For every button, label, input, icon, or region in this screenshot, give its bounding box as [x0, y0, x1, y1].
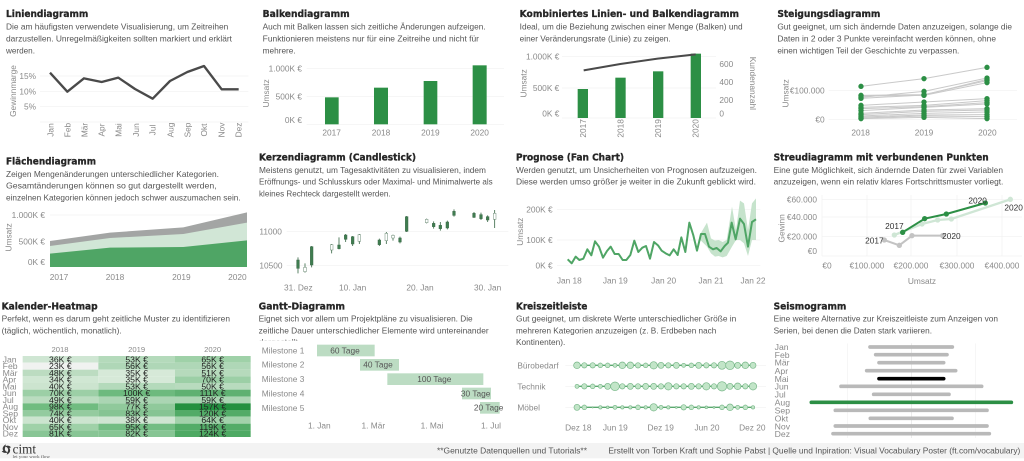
description: Kerzendiagramm	[259, 165, 493, 198]
connected scatter plot	[776, 195, 1023, 286]
combo chart: Umsatz und Kundenanzahl: 500K €	[533, 83, 560, 93]
heatmap table: 56K €	[201, 361, 224, 371]
circle timeline chart: Möbel	[517, 403, 540, 413]
combo chart: Umsatz und Kundenanzahl	[518, 52, 758, 138]
description: Kreiszeitleiste: mehreren Kategorien anzuzeigen (z. B. Erdbeben nach	[516, 325, 717, 335]
heatmap table: 83K €	[125, 408, 148, 418]
description: Kreiszeitleiste: Kontinenten).	[516, 337, 565, 347]
heading: Kreiszeitleiste: Kreiszeitleiste	[516, 302, 588, 313]
heatmap table: 59K €	[125, 395, 148, 405]
description: Balkendiagramm: mehrere.	[263, 45, 296, 55]
seismogram chart: Aug	[775, 398, 790, 408]
heatmap table: 124K €	[199, 429, 227, 439]
connected scatter plot: €60.000	[787, 195, 817, 205]
line chart: Gewinnmarge: Gewinnmarge	[8, 65, 18, 117]
panel: Flächendiagramm	[3, 156, 247, 282]
heatmap table: Jan	[3, 354, 17, 364]
line chart: Gewinnmarge	[8, 65, 248, 137]
combo chart: Umsatz und Kundenanzahl: 2018	[615, 119, 625, 138]
heatmap table: Jun	[3, 388, 17, 398]
panel: Kreiszeitleiste	[516, 302, 766, 433]
description: Seismogramm	[774, 314, 998, 335]
heatmap table: 120K €	[199, 408, 227, 418]
line chart: Gewinnmarge: Sep	[182, 122, 192, 137]
fan chart: Umsatz: 100K €	[526, 235, 553, 245]
circle timeline chart: Dez 20	[739, 423, 766, 433]
panel: Liniendiagramm	[5, 9, 248, 137]
heading: Balkendiagramm: Balkendiagramm	[263, 9, 350, 20]
description: Kalender-Heatmap: (täglich, wöchentlich, monatlich).	[2, 325, 122, 335]
description: Balkendiagramm: Auch mit Balken lassen sich zeitliche Änderungen aufzeigen.	[263, 21, 486, 31]
bar chart: Umsatz: 1.000K €	[269, 63, 302, 73]
description: Kombiniertes Diagramm	[520, 21, 743, 43]
heatmap table: 65K €	[201, 354, 224, 364]
area chart: Umsatz: 0K €	[28, 257, 45, 267]
heatmap table: Mär	[3, 368, 18, 378]
panel: Steigungsdiagramm	[777, 9, 1017, 138]
bar chart: Umsatz: 0K €	[285, 115, 302, 125]
description: Liniendiagramm: darzustellen. Unregelmäßigkeiten sollten markiert und erklärt	[6, 33, 233, 43]
heatmap table: 40K €	[49, 415, 72, 425]
description: Flächendiagramm: Zeigen Mengenänderungen unterschiedlicher Kategorien.	[6, 169, 219, 179]
line chart: Gewinnmarge: 10%	[19, 86, 37, 96]
description: Kalender-Heatmap: Perfekt, wenn es darum geht zeitliche Muster zu identifizieren	[2, 314, 230, 324]
connected scatter plot: Umsatz	[908, 276, 936, 286]
heatmap table: 64K €	[201, 415, 224, 425]
heading: Seismogramm: Seismogramm	[774, 302, 846, 313]
heatmap table: Feb	[3, 361, 18, 371]
description: Prognose: Werden genutzt, um Unsicherheiten von Prognosen aufzuzeigen.	[516, 165, 757, 175]
gantt chart: 1. Jan	[308, 420, 331, 430]
connected scatter plot: 2020	[1004, 202, 1023, 212]
gantt chart: Milestone 5	[262, 403, 305, 413]
panel: Kerzendiagramm	[259, 153, 508, 292]
connected scatter plot: €400.000	[985, 261, 1020, 271]
seismogram chart: Jan	[775, 342, 789, 352]
description: Liniendiagramm	[5, 21, 233, 55]
heading: Kalender-Heatmap: Kalender-Heatmap	[2, 302, 98, 313]
bar chart: Umsatz	[261, 63, 504, 138]
seismogram chart: Nov	[775, 421, 791, 431]
candlestick chart	[259, 209, 508, 292]
description: Kombiniertes Diagramm: einer Veränderungsrate (Linie) zu zeigen.	[520, 33, 671, 43]
seismogram chart: Apr	[775, 366, 788, 376]
seismogram chart: Mär	[775, 358, 790, 368]
line chart: Gewinnmarge: Dez	[234, 123, 244, 137]
fan chart: Umsatz: Jan 18	[557, 276, 582, 286]
heatmap table: 34K €	[49, 375, 72, 385]
heatmap table: 98K €	[49, 402, 72, 412]
gantt chart: Milestone 1	[262, 345, 305, 355]
candlestick chart: 31. Dez	[284, 282, 313, 292]
heatmap table: Dez	[3, 429, 18, 439]
heatmap table: Sep	[3, 408, 18, 418]
description: Kerzendiagramm: Eröffnungs- und Schlusskurs oder Maximal- und Minimalwerte als	[259, 177, 493, 187]
combo chart: Umsatz und Kundenanzahl: 200	[719, 95, 734, 105]
seismogram chart: Mai	[775, 374, 789, 384]
line chart: Gewinnmarge: Mär	[80, 123, 90, 137]
connected scatter plot: €100.000	[850, 261, 885, 271]
heatmap table: 23K €	[49, 361, 72, 371]
line chart: Gewinnmarge: Jul	[148, 125, 158, 135]
fan chart: Umsatz: Jan 19	[603, 276, 628, 286]
bar chart: Umsatz: Umsatz	[261, 79, 271, 107]
circle timeline chart: Jun 19	[603, 423, 628, 433]
heatmap table: 70K €	[49, 388, 72, 398]
combo chart: Umsatz und Kundenanzahl: 0	[719, 108, 724, 118]
fan chart: Umsatz	[515, 198, 766, 286]
connected scatter plot: 2017	[885, 221, 904, 231]
description: Steigungsdiagramm: einen wichtigen Teil der Geschichte zu verpassen.	[777, 45, 959, 55]
heatmap table: 65K €	[49, 422, 72, 432]
circle timeline chart	[517, 360, 766, 433]
area chart: Umsatz: 1.000K €	[12, 210, 45, 220]
line chart: Gewinnmarge: Nov	[217, 122, 227, 137]
description: Prognose	[516, 165, 757, 187]
heatmap table: 35K €	[125, 375, 148, 385]
connected scatter plot: 2020	[942, 231, 961, 241]
gantt chart: Milestone 2	[262, 360, 305, 370]
panel: Streudiagramm	[774, 153, 1023, 286]
line chart: Gewinnmarge: Mai	[113, 123, 123, 137]
gantt chart: 60 Tage	[330, 345, 360, 355]
description: Gantt-Diagramm: dargestellt.	[259, 337, 300, 347]
area chart: Umsatz	[3, 210, 247, 282]
slope chart: Umsatz: 2018	[851, 128, 870, 138]
area chart: Umsatz: 2017	[50, 272, 69, 282]
footer credits: Erstellt von Torben Kraft und Sophie Pabst | Quelle und Inpiration: Visual Vocabulary Poster (ft.com/vocabulary)	[608, 446, 1020, 456]
gantt chart: Milestone 3	[262, 374, 305, 384]
circle timeline chart: Bürobedarf	[517, 360, 559, 370]
description: Gantt-Diagramm	[256, 314, 509, 349]
description: Liniendiagramm: Die am häufigsten verwendete Visualisierung, um Zeitreihen	[6, 21, 228, 31]
fan chart: Umsatz: Jan 22	[740, 276, 766, 286]
footer note: data sources: **Genutzte Datenquellen und Tutorials**	[437, 446, 588, 456]
logo wordmark	[13, 441, 50, 459]
description: Steigungsdiagramm	[777, 21, 1012, 55]
description: Prognose: Diese werden umso größer je weiter in die Zukunft geblickt wird.	[516, 177, 756, 187]
heatmap table: 51K €	[201, 368, 224, 378]
description: Kreiszeitleiste: Gut geeignet, um diskrete Werte unterschiedlicher Größe in	[516, 314, 736, 324]
seismogram chart: Sep	[775, 405, 790, 415]
heatmap table: 35K €	[125, 368, 148, 378]
logo wordmark: cimt	[13, 441, 36, 456]
seismogram chart: Feb	[775, 350, 790, 360]
line chart: Gewinnmarge: Apr	[97, 123, 107, 136]
area chart: Umsatz: 500K €	[19, 236, 45, 246]
heatmap table: 53K €	[125, 381, 148, 391]
heatmap table: 100K €	[123, 388, 151, 398]
panel: Balkendiagramm	[261, 9, 504, 138]
logo wordmark: let your work flow	[13, 454, 50, 459]
connected scatter plot: €0	[822, 261, 832, 271]
line chart: Gewinnmarge: Jan	[46, 123, 56, 137]
candlestick chart: 20. Jan	[406, 282, 434, 292]
candlestick chart: 30. Jan	[474, 282, 502, 292]
combo chart: Umsatz und Kundenanzahl: 0K €	[542, 108, 560, 118]
combo chart: Umsatz und Kundenanzahl: Umsatz	[518, 69, 528, 97]
heatmap table: 111K €	[200, 388, 226, 398]
description: Kerzendiagramm: Meistens genutzt, um Tagesaktivitäten zu visualisieren, indem	[259, 165, 486, 175]
description: Kerzendiagramm: kleines Rechteck dargestellt werden.	[259, 188, 391, 198]
connected scatter plot: Gewinn	[776, 214, 786, 242]
panel: Kombiniertes Linien- und Balkendiagramm	[518, 9, 758, 138]
combo chart: Umsatz und Kundenanzahl: 400	[719, 77, 734, 87]
circle timeline chart: Dez 18	[565, 423, 592, 433]
fan chart: Umsatz: 0K €	[536, 261, 553, 271]
bar chart: Umsatz: 2020	[470, 128, 489, 138]
circle timeline chart: Jun 20	[694, 423, 720, 433]
candlestick chart: 10500	[259, 261, 283, 271]
description: Flächendiagramm: einzelnen Kategorien können jedoch schwer auszumachen sein.	[6, 192, 241, 202]
fan chart: Umsatz: 200K €	[526, 204, 553, 214]
line chart: Gewinnmarge: Okt	[199, 123, 209, 136]
description: Balkendiagramm	[263, 21, 486, 55]
description: Steigungsdiagramm: Gut geeignet, um sich ändernde Daten anzuzeigen, solange die	[777, 21, 1012, 31]
slope chart: Umsatz: 2020	[978, 128, 997, 138]
heading: Kombiniertes Linien- und Balkendiagramm: Kombiniertes Linien- und Balkendiagramm	[520, 9, 739, 20]
candlestick chart: 10. Jan	[339, 282, 367, 292]
icon: cimt logo mark	[2, 444, 11, 455]
description: Flächendiagramm	[6, 169, 241, 202]
description: Streudiagramm: anzuzeigen, wenn ein relativ klares Fortschrittsmuster vorliegt.	[774, 177, 1003, 187]
connected scatter plot: €200.000	[894, 261, 929, 271]
heatmap table: 38K €	[125, 415, 148, 425]
connected scatter plot: €0	[808, 246, 817, 256]
panel: Kalender-Heatmap	[2, 302, 251, 439]
line chart: Gewinnmarge: 15%	[19, 71, 37, 81]
heatmap table: 2018	[51, 345, 69, 354]
heatmap table: 56K €	[125, 361, 148, 371]
heatmap table: 95K €	[125, 422, 148, 432]
area chart: Umsatz: 2019	[172, 272, 191, 282]
heading: Gantt-Diagramm: Gantt-Diagramm	[259, 302, 345, 313]
gantt chart: 40 Tage	[363, 360, 393, 370]
description: Streudiagramm: Eine gute Möglichkeit, sich ändernde Daten für zwei Variablen	[774, 165, 1003, 175]
heatmap table: 49K €	[49, 395, 72, 405]
slope chart: Umsatz	[780, 65, 1017, 138]
heading: Prognose: Prognose (Fan Chart)	[516, 153, 624, 164]
heatmap table: 74K €	[49, 408, 72, 418]
panel: Seismogramm	[774, 302, 1011, 439]
panel: Prognose	[515, 153, 766, 286]
gantt chart	[262, 345, 504, 430]
heatmap table: 36K €	[49, 354, 72, 364]
heatmap table: Jul	[3, 395, 14, 405]
heatmap table: 81K €	[49, 429, 72, 439]
combo chart: Umsatz und Kundenanzahl: Kundenanzahl	[748, 57, 758, 110]
fan chart: Umsatz: Jan 20	[651, 276, 677, 286]
heatmap table: 119K €	[199, 422, 226, 432]
gantt chart: 20 Tage	[474, 403, 504, 413]
description: Streudiagramm	[774, 165, 1003, 187]
heatmap table: 157K €	[199, 402, 227, 412]
gantt chart: 1. Mai	[421, 420, 443, 430]
seismogram chart	[775, 342, 1011, 439]
seismogram chart: Okt	[775, 413, 789, 423]
heatmap table: 59K €	[201, 395, 224, 405]
gantt chart: 1. Jul	[481, 420, 501, 430]
seismogram chart: Dez	[775, 429, 790, 439]
seismogram chart: Jul	[775, 390, 786, 400]
connected scatter plot: €300.000	[940, 261, 975, 271]
description: Flächendiagramm: Gesamtänderungen können so gut dargestellt werden,	[6, 181, 217, 191]
heatmap table: Apr	[3, 375, 16, 385]
heatmap table: 40K €	[49, 381, 72, 391]
description: Kreiszeitleiste	[516, 314, 736, 347]
line chart: Gewinnmarge: Jun	[131, 123, 141, 137]
description: Liniendiagramm: werden.	[5, 45, 35, 55]
description: Seismogramm: Eine weitere Alternative zur Kreiszeitleiste zum Anzeigen von	[774, 314, 998, 324]
bar chart: Umsatz: 500K €	[276, 91, 302, 101]
panel: Gantt-Diagramm	[256, 302, 509, 430]
connected scatter plot: €40.000	[787, 212, 817, 222]
circle timeline chart: Technik	[517, 382, 546, 392]
heatmap table: Nov	[3, 422, 19, 432]
heatmap table: 82K €	[125, 429, 148, 439]
description: Gantt-Diagramm: zeitliche Dauer unterschiedlicher Elemente wird untereinander	[259, 325, 489, 335]
bar chart: Umsatz: 2017	[322, 128, 341, 138]
gantt chart: Milestone 4	[262, 388, 305, 398]
heading: Liniendiagramm: Liniendiagramm	[6, 9, 88, 20]
description: Kombiniertes Diagramm: Ideal, um die Beziehung zwischen einer Menge (Balken) und	[520, 21, 743, 31]
heatmap table: 48K €	[49, 368, 72, 378]
heatmap table: 70K €	[201, 375, 224, 385]
slope chart: Umsatz: Umsatz	[780, 79, 790, 107]
combo chart: Umsatz und Kundenanzahl: 2017	[578, 119, 588, 138]
line chart: Gewinnmarge: Aug	[166, 122, 176, 137]
connected scatter plot: 2020	[968, 196, 987, 206]
line chart: Gewinnmarge: 5%	[24, 102, 37, 112]
combo chart: Umsatz und Kundenanzahl: 2020	[691, 119, 701, 138]
slope chart: Umsatz: 2019	[915, 128, 934, 138]
bar chart: Umsatz: 2018	[372, 128, 391, 138]
footer bar	[0, 441, 1024, 459]
gantt chart: 1. Mär	[362, 420, 385, 430]
heatmap table: Okt	[3, 415, 17, 425]
fan chart: Umsatz: Jan 21	[698, 276, 724, 286]
connected scatter plot: 2017	[865, 235, 884, 245]
heatmap table: 2019	[128, 345, 145, 354]
seismogram chart: Jun	[775, 382, 789, 392]
heatmap table: 77K €	[125, 402, 148, 412]
heatmap table: Aug	[3, 402, 18, 412]
gantt chart: 100 Tage	[417, 374, 452, 384]
heading: Kerzendiagramm: Kerzendiagramm (Candlestick)	[259, 153, 416, 164]
combo chart: Umsatz und Kundenanzahl: 600	[719, 59, 734, 69]
description: Gantt-Diagramm: Eignet sich vor allem um Projektpläne zu visualisieren. Die	[259, 314, 473, 324]
bar chart: Umsatz: 2019	[421, 128, 440, 138]
line chart: Gewinnmarge: Feb	[62, 122, 72, 137]
heading: Steigungsdiagramm: Steigungsdiagramm	[777, 9, 880, 20]
heatmap table: Mai	[3, 381, 17, 391]
heatmap table: 2020	[204, 345, 221, 354]
slope chart: Umsatz: €100.000	[790, 86, 825, 96]
fan chart: Umsatz: Umsatz	[515, 218, 525, 246]
area chart: Umsatz: Umsatz	[3, 223, 13, 251]
heatmap table	[3, 345, 251, 439]
heading: Flächendiagramm: Flächendiagramm	[6, 156, 96, 167]
area chart: Umsatz: 2018	[106, 272, 125, 282]
heatmap table: 53K €	[125, 354, 148, 364]
combo chart: Umsatz und Kundenanzahl: 1.000K €	[526, 52, 560, 62]
description: Seismogramm: Serien, bei denen die Daten stark variieren.	[774, 325, 932, 335]
description: Steigungsdiagramm: Daten in 2 oder 3 Punkte vereinfacht werden können, ohne	[777, 33, 996, 43]
candlestick chart: 11000	[259, 227, 282, 237]
combo chart: Umsatz und Kundenanzahl: 2019	[653, 119, 663, 138]
description: Kalender-Heatmap	[2, 314, 230, 335]
circle timeline chart: Dez 19	[647, 423, 674, 433]
heatmap table: 50K €	[201, 381, 224, 391]
slope chart: Umsatz: €0	[815, 115, 825, 125]
gantt chart: 30 Tage	[461, 388, 491, 398]
heading: Streudiagramm: Streudiagramm mit verbundenen Punkten	[774, 153, 989, 164]
description: Balkendiagramm: Funktionieren meistens nur für eine Zeitreihe und nicht für	[263, 33, 479, 43]
connected scatter plot: €20.000	[787, 231, 817, 241]
area chart: Umsatz: 2020	[228, 272, 247, 282]
